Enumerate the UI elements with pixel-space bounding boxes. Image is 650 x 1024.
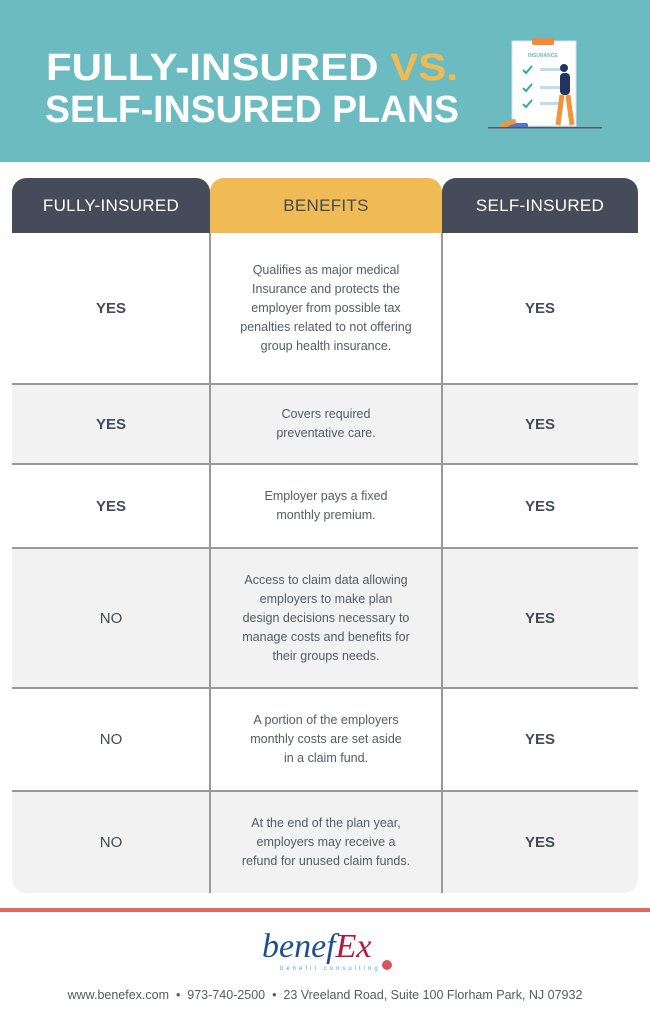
row 6: At the end of the plan year, <box>251 816 401 830</box>
row 6: YES <box>525 834 555 851</box>
header: fully-insured: FULLY-INSURED <box>43 196 179 214</box>
row 3: YES <box>96 498 126 514</box>
header: self-insured: SELF-INSURED <box>476 196 604 214</box>
row 1: Qualifies as major medical <box>253 262 399 276</box>
row 5: monthly costs are set aside <box>250 732 402 746</box>
row 4: employers to make plan <box>260 592 392 606</box>
row 5: A portion of the employers <box>253 713 399 727</box>
row 4: YES <box>525 610 555 626</box>
header: benefits: BENEFITS <box>283 196 369 214</box>
row 3: YES <box>525 498 555 514</box>
row 4: Access to claim data allowing <box>244 572 408 586</box>
row 4: manage costs and benefits for <box>242 630 410 644</box>
row 4: their groups needs. <box>272 648 380 662</box>
row 1: YES <box>525 300 555 316</box>
icon: insurance clipboard illustration <box>488 38 602 128</box>
row 2 <box>96 407 555 440</box>
row 3 <box>96 489 555 522</box>
row 4 <box>100 572 555 662</box>
footer contact info: www.benefex.com • 973-740-2500 • 23 Vreeland Road, Suite 100 Florham Park, NJ 07932 <box>68 988 582 1002</box>
row 4: design decisions necessary to <box>243 610 409 624</box>
row 6 <box>100 816 555 868</box>
row 2: YES <box>96 416 126 432</box>
row 5: in a claim fund. <box>284 751 368 765</box>
row 5: NO <box>100 731 122 748</box>
row 6: refund for unused claim funds. <box>242 854 410 868</box>
row 1: penalties related to not offering <box>240 320 412 334</box>
header banner <box>0 0 650 162</box>
row 2: Covers required <box>282 407 370 421</box>
row 3: monthly premium. <box>276 508 376 522</box>
row backgrounds <box>12 383 638 463</box>
row 6: employers may receive a <box>257 835 395 849</box>
logo: benefEx: benefEx <box>262 928 372 965</box>
row 1: Insurance and protects the <box>252 282 400 296</box>
row 6: NO <box>100 834 122 851</box>
row 5 <box>100 713 555 765</box>
row 5: YES <box>525 731 555 748</box>
logo: benefEx: benefit consulting <box>280 966 381 972</box>
row 1 <box>96 262 555 352</box>
row 1: employer from possible tax <box>251 300 401 314</box>
row 1: YES <box>96 300 126 316</box>
row 1: group health insurance. <box>261 338 391 352</box>
header: fully-insured <box>12 178 210 233</box>
icon: insurance clipboard illustration: INSURANCE <box>528 53 558 59</box>
title <box>45 47 459 131</box>
row 2: preventative care. <box>276 426 376 440</box>
comparison table <box>12 178 638 893</box>
title: FULLY-INSURED VS. <box>46 47 458 89</box>
row 4: NO <box>100 610 122 626</box>
row 3: Employer pays a fixed <box>264 489 387 503</box>
header: self-insured <box>442 178 638 233</box>
row 2: YES <box>525 416 555 432</box>
header: benefits <box>210 178 442 233</box>
title: SELF-INSURED PLANS <box>45 89 459 131</box>
